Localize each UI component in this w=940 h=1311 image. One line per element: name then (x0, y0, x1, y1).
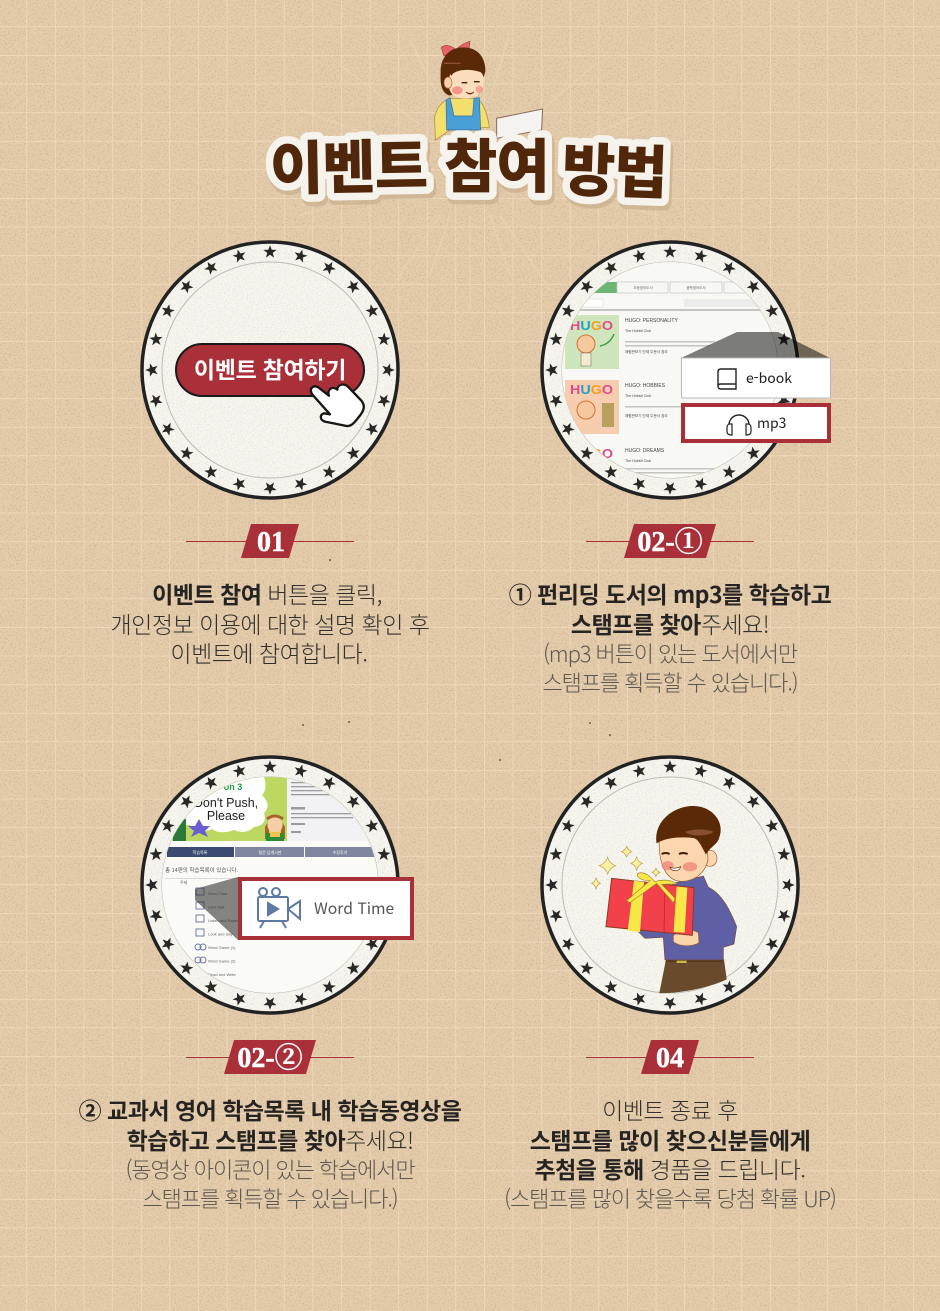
title: 이벤트 (269, 120, 428, 206)
title: 참여 (444, 120, 549, 204)
callout: Word Time button: Word Time (314, 896, 395, 919)
callout: zoom shadow (681, 332, 830, 358)
text block: step 02-1: 스탬프를 찾아주세요! (571, 606, 769, 640)
text block: step 04: 이벤트 종료 후 (602, 1092, 738, 1126)
title: 참여 (444, 120, 549, 204)
screenshot: textbook lesson page: Read and Write (208, 972, 236, 977)
text block: step 04: 추첨을 통해 경품을 드립니다. (534, 1151, 806, 1185)
header illustration: girl with paper (435, 41, 543, 140)
book cover 3: HUGO (570, 446, 613, 461)
badge: 02-2 (186, 1040, 354, 1074)
panel: step 01 circle with event button (142, 242, 398, 498)
title: 방법 (563, 127, 670, 215)
title: 참여 (446, 124, 551, 208)
screenshot: textbook lesson page: Let's Talk (208, 904, 224, 910)
icon: movie camera (258, 888, 300, 928)
screenshot: pen reading book list: The Hobbit Club (625, 394, 651, 398)
illustration: boy holding gift (592, 806, 737, 993)
text block: step 02-2: (동영상 아이콘이 있는 학습에서만 (126, 1153, 415, 1185)
text block: step 01: 이벤트에 참여합니다. (170, 635, 368, 669)
panel: step 02-1 circle with book list (542, 242, 830, 498)
title: 방법 (561, 123, 668, 211)
text block: step 01 (111, 576, 429, 669)
callout: e-book button (682, 358, 830, 398)
badge: 02-2: 02-② (237, 1042, 303, 1074)
title (269, 120, 670, 215)
screenshot: textbook lesson page: Word Time (208, 891, 228, 896)
book cover 1: HUGO (570, 318, 613, 333)
badge: 02-1: 02-① (637, 526, 703, 558)
screenshot: pen reading book list: 체험판보기 단체 주문서 참조 (625, 413, 668, 419)
text block: step 02-2: 학습하고 스탬프를 찾아주세요! (127, 1122, 413, 1156)
screenshot: textbook lesson page: 주제 (180, 879, 188, 886)
book cover 2: HUGO (570, 382, 613, 397)
icon: pointing hand (311, 385, 364, 426)
screenshot: textbook lesson page: Don't Push, (194, 796, 258, 810)
screenshot: textbook lesson page: 학습목록 (193, 849, 208, 856)
screenshot: pen reading book list: The Hobbit Club (625, 329, 651, 333)
text block: step 02-1: ① 펀리딩 도서의 mp3를 학습하고 (509, 576, 832, 610)
button: event participation (176, 344, 364, 396)
screenshot: pen reading book list: 중학영어도서 (686, 285, 706, 291)
text block: step 04 (504, 1092, 836, 1214)
text block: step 04: 스탬프를 많이 찾으신분들에게 (530, 1122, 810, 1156)
screenshot: textbook lesson page: on 3 (224, 782, 242, 792)
icon: reading girl (265, 816, 285, 841)
badge: 02-1 (586, 524, 754, 558)
callout: Word Time button (240, 879, 412, 938)
badge: 01: 01 (257, 527, 285, 558)
screenshot: pen reading book list: 체험판보기 단체 주문서 참조 (625, 349, 668, 355)
screenshot: pen reading book list (562, 262, 778, 478)
badge: 04 (586, 1040, 754, 1074)
book cover 1 (565, 315, 619, 369)
screenshot: textbook lesson page: Word Game (1) (208, 945, 236, 950)
screenshot: pen reading book list: The Hobbit Club (625, 459, 651, 463)
screenshot: textbook lesson page: 질문 답게시판 (258, 849, 282, 856)
callout: mp3 button: mp3 (757, 413, 786, 433)
callout: mp3 button (683, 405, 829, 441)
panel: step 02-2 circle with lesson page (142, 757, 412, 1013)
text block: step 02-2: ② 교과서 영어 학습목록 내 학습동영상을 (79, 1092, 462, 1126)
text block: step 02-1: 스탬프를 획득할 수 있습니다.) (542, 666, 798, 698)
callout: e-book button: e-book (746, 368, 792, 388)
book cover 2 (565, 380, 619, 434)
screenshot: textbook lesson page: Please (207, 809, 245, 823)
screenshot: pen reading book list: HUGO: DREAMS (625, 448, 665, 454)
text block: step 01: 개인정보 이용에 대한 설명 확인 후 (111, 606, 429, 640)
callout: zoom shadow (195, 877, 238, 940)
screenshot: pen reading book list: 초등영어도서 (633, 285, 653, 291)
title: 이벤트 (269, 120, 428, 206)
text block: step 02-2: 스탬프를 획득할 수 있습니다.) (142, 1182, 398, 1214)
text block: step 02-1: (mp3 버튼이 있는 도서에서만 (543, 637, 798, 669)
screenshot: textbook lesson page: Listen and Repeat (208, 918, 241, 923)
button: event participation: 이벤트 참여하기 (194, 351, 346, 385)
screenshot: pen reading book list: HUGO: PERSONALITY (625, 318, 678, 324)
text block: step 02-1 (509, 576, 832, 698)
title: 방법 (561, 123, 668, 211)
panel: step 04 circle with boy and gift (542, 757, 798, 1013)
screenshot: textbook lesson page: 총 14편의 학습목록이 있습니다. (165, 866, 238, 874)
text block: step 02-2 (79, 1092, 462, 1214)
screenshot: pen reading book list: HUGO: HOBBIES (625, 383, 666, 389)
badge: 04: 04 (656, 1043, 684, 1074)
text block: step 04: (스탬프를 많이 찾을수록 당첨 확률 UP) (504, 1182, 836, 1214)
screenshot: textbook lesson page: Word Game (2) (208, 958, 236, 964)
badge: 01 (186, 524, 354, 558)
screenshot: textbook lesson page: Look and Say (208, 932, 232, 936)
screenshot: textbook lesson page (162, 777, 378, 993)
text block: step 01: 이벤트 참여 버튼을 클릭, (152, 576, 382, 610)
screenshot: textbook lesson page: 수강후기 (333, 849, 348, 856)
title: 이벤트 (271, 124, 430, 210)
